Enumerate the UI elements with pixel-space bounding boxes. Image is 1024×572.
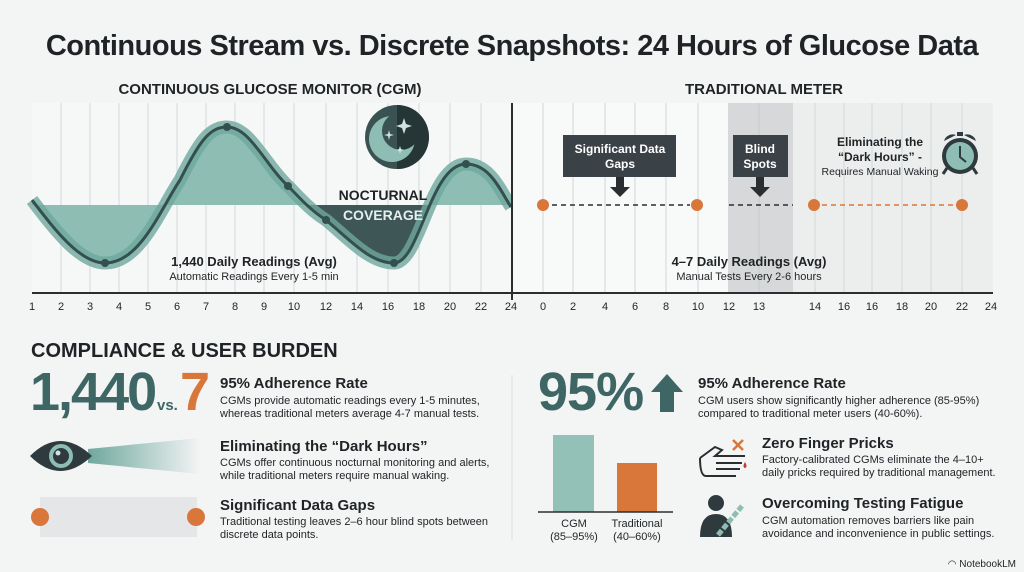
text: data gaps: Significant Data Gaps xyxy=(220,497,375,514)
axis labels: CGM: 5 xyxy=(145,301,151,313)
text: dark hours: while traditional meters require manual waking. xyxy=(219,470,449,482)
axis labels: CGM xyxy=(29,301,517,313)
axis labels: traditional: 10 xyxy=(692,301,704,313)
axis labels: traditional: 24 xyxy=(985,301,997,313)
axis labels: CGM: 9 xyxy=(261,301,267,313)
text: 1440 readings: Automatic Readings Every 1-5 min xyxy=(169,271,339,283)
axis labels: CGM: 1 xyxy=(29,301,35,313)
curve line xyxy=(32,127,511,263)
axis labels: traditional: 13 xyxy=(753,301,765,313)
text: data gaps: Traditional testing leaves 2–6 hour blind spots between xyxy=(220,516,488,528)
text: 1440 readings xyxy=(169,254,339,283)
axis labels: CGM: 6 xyxy=(174,301,180,313)
text: 4-7 readings: Manual Tests Every 2-6 hours xyxy=(676,271,822,283)
callout: significant data gaps: Significant Data xyxy=(575,142,666,156)
text: finger pricks: daily pricks required by traditional management. xyxy=(762,467,996,479)
axis labels: traditional: 20 xyxy=(925,301,937,313)
text: adherence rate right xyxy=(698,375,979,420)
text: finger pricks: Factory-calibrated CGMs eliminate the 4–10+ xyxy=(762,454,984,466)
label: nocturnal coverage xyxy=(339,187,428,223)
label: nocturnal coverage: COVERAGE xyxy=(343,207,423,223)
axis labels: CGM: 14 xyxy=(351,301,363,313)
callout: blind spots: Blind xyxy=(745,142,775,156)
axis labels: traditional: 14 xyxy=(809,301,821,313)
icon: eye xyxy=(30,438,200,474)
axis labels: traditional: 6 xyxy=(632,301,638,313)
axis labels: CGM: 16 xyxy=(382,301,394,313)
text: 4-7 readings xyxy=(672,254,826,283)
callout: blind spots: Spots xyxy=(743,157,777,171)
axis labels: CGM: 24 xyxy=(505,301,517,313)
watermark: NotebookLM: ◠ NotebookLM xyxy=(948,559,1016,570)
axis labels: CGM: 10 xyxy=(288,301,300,313)
text: dark hours xyxy=(822,135,939,178)
callout: significant data gaps xyxy=(563,135,676,197)
axis labels: traditional: 2 xyxy=(570,301,576,313)
axis labels: CGM: 20 xyxy=(444,301,456,313)
text: testing fatigue xyxy=(762,495,994,540)
text: dark hours: Eliminating the “Dark Hours” xyxy=(220,438,428,455)
text: testing fatigue: avoidance and inconvenience in public settings. xyxy=(762,528,994,540)
stat: 1440 vs 7: 7 xyxy=(180,362,210,422)
axis labels: traditional xyxy=(540,301,997,313)
heading: traditional meter: TRADITIONAL METER xyxy=(685,81,843,98)
text: finger pricks: Zero Finger Pricks xyxy=(762,435,894,452)
bar chart: CGM xyxy=(561,518,587,530)
panel: CGM chart xyxy=(32,103,512,293)
icon: moon xyxy=(365,105,429,169)
stat: 1440 vs 7 xyxy=(30,362,210,422)
text: adherence rate xyxy=(219,375,480,420)
text: 1440 readings: 1,440 Daily Readings (Avg) xyxy=(171,254,337,269)
axis labels: traditional: 4 xyxy=(602,301,608,313)
axis labels: traditional: 22 xyxy=(956,301,968,313)
text: adherence rate: CGMs provide automatic readings every 1-5 minutes, xyxy=(220,395,480,407)
bar chart: Traditional xyxy=(612,518,662,530)
axis labels: CGM: 12 xyxy=(320,301,332,313)
heading: compliance: COMPLIANCE & USER BURDEN xyxy=(31,340,338,362)
callout: significant data gaps: Gaps xyxy=(605,157,635,171)
text: 4-7 readings: 4–7 Daily Readings (Avg) xyxy=(672,254,826,269)
axis labels: CGM: 18 xyxy=(413,301,425,313)
axis labels: CGM: 22 xyxy=(475,301,487,313)
bar chart: (40–60%) xyxy=(613,531,661,543)
icon: alarm clock xyxy=(942,132,978,174)
text: testing fatigue: Overcoming Testing Fatigue xyxy=(762,495,963,512)
axis labels: CGM: 3 xyxy=(87,301,93,313)
callout: blind spots xyxy=(733,135,788,197)
stat: 95%: 95% xyxy=(538,362,643,422)
axis labels: CGM: 4 xyxy=(116,301,122,313)
axis labels: traditional: 16 xyxy=(866,301,878,313)
text: adherence rate: 95% Adherence Rate xyxy=(220,375,368,392)
text: testing fatigue: CGM automation removes barriers like pain xyxy=(762,515,974,527)
curve band xyxy=(32,127,511,263)
text: data gaps: discrete data points. xyxy=(220,529,318,541)
icon: finger xyxy=(700,440,746,476)
axis labels: traditional: 18 xyxy=(896,301,908,313)
area fill xyxy=(32,127,511,263)
axis labels: traditional: 16 xyxy=(838,301,850,313)
text: adherence rate right: 95% Adherence Rate xyxy=(698,375,846,392)
axis labels: traditional: 12 xyxy=(723,301,735,313)
axis labels: traditional: 0 xyxy=(540,301,546,313)
text: adherence rate: whereas traditional meters average 4-7 manual tests. xyxy=(219,408,479,420)
text: dark hours: Eliminating the xyxy=(837,135,923,149)
panel: traditional meter chart xyxy=(512,103,993,293)
dashed lines xyxy=(552,204,690,206)
title: Continuous Stream vs. Discrete Snapshots: 24 Hours of Glucose Data xyxy=(46,30,980,62)
axis labels: CGM: 7 xyxy=(203,301,209,313)
text: dark hours xyxy=(219,438,489,482)
axis labels: CGM: 8 xyxy=(232,301,238,313)
axis labels: CGM: 2 xyxy=(58,301,64,313)
stat: 1440 vs 7: vs. xyxy=(157,397,178,414)
text: adherence rate right: compared to traditional meter users (40-60%). xyxy=(698,408,922,420)
icon: data gap xyxy=(31,497,205,537)
axis labels: traditional: 8 xyxy=(663,301,669,313)
text: adherence rate right: CGM users show significantly higher adherence (85-95%) xyxy=(698,395,979,407)
heading: CGM: CONTINUOUS GLUCOSE MONITOR (CGM) xyxy=(118,81,422,98)
bar chart: (85–95%) xyxy=(550,531,598,543)
stat: 1440 vs 7: 1,440 xyxy=(30,362,155,422)
reading dots xyxy=(537,199,968,211)
label: nocturnal coverage: NOCTURNAL xyxy=(339,187,428,203)
bar chart xyxy=(538,435,673,543)
text: dark hours: Requires Manual Waking xyxy=(822,166,939,178)
text: dark hours: CGMs offer continuous nocturnal monitoring and alerts, xyxy=(220,457,489,469)
text: data gaps xyxy=(220,497,488,541)
text: dark hours: “Dark Hours” - xyxy=(838,150,922,164)
icon: person with chain xyxy=(700,495,742,537)
text: finger pricks xyxy=(762,435,996,479)
